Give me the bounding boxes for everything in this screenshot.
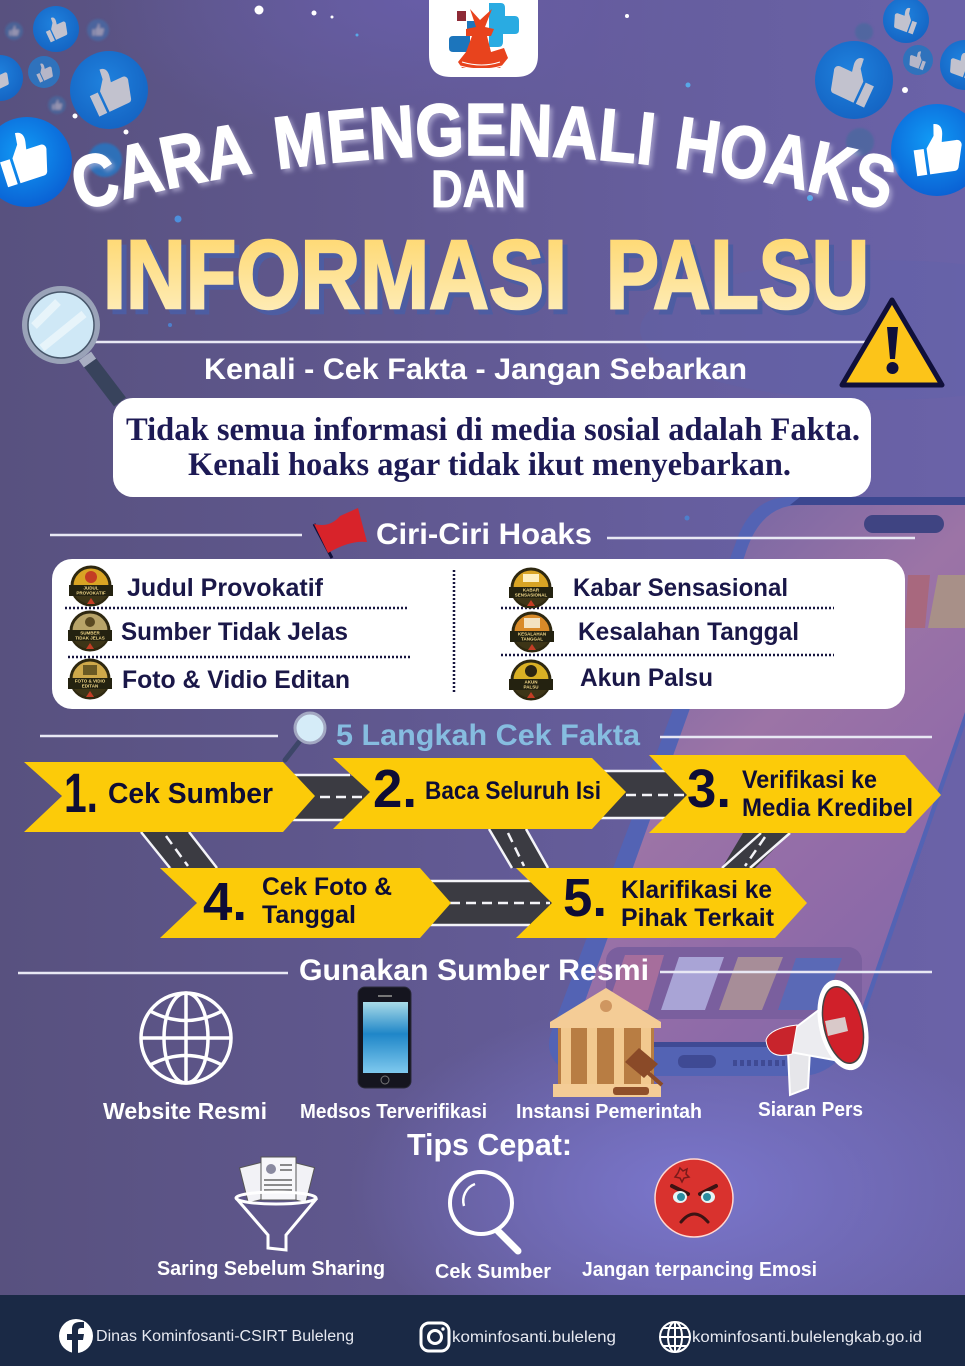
thumbs-up bubbles left [0,6,148,207]
icon: angry face [655,1159,733,1237]
badge: judul provokatif: PROVOKATIF [76,590,106,596]
panel: ciri-ciri list [52,559,905,709]
panel: intro message: Kenali hoaks agar tidak ikut menyebarkan. [188,447,791,483]
heading: ciri-ciri hoaks: Ciri-Ciri Hoaks [376,518,592,551]
divider under title [95,341,865,343]
badge: foto vidio editan: FOTO & VIDIO [75,678,106,684]
step 2: Baca Seluruh Isi [425,777,601,805]
step 5: Pihak Terkait [621,904,775,932]
badge: kabar sensasional: SENSASIONAL [515,592,547,598]
badge: sumber tidak jelas [68,612,112,650]
label: kabar sensasional: Kabar Sensasional [573,574,788,602]
title arc: MENGENALI [274,103,659,174]
badge: kabar sensasional: KABAR [523,588,540,592]
heading: gunakan sumber resmi: Gunakan Sumber Resmi [299,954,649,987]
step 4: Tanggal [262,901,356,929]
title informasi palsu: PALSU [606,220,869,329]
logo [429,0,538,77]
label: judul provokatif: Judul Provokatif [127,574,324,602]
step 2 [333,758,626,829]
badge: akun palsu: PALSU [524,684,538,690]
badge: akun palsu [509,661,553,699]
tagline: Kenali - Cek Fakta - Jangan Sebarkan [204,353,747,386]
labels: quick tips: Cek Sumber [435,1261,551,1283]
badge: foto vidio editan: EDITAN [82,684,98,688]
badge: akun palsu: AKUN [524,680,538,684]
title DAN: DAN [431,160,526,219]
title informasi palsu: INFORMASI [108,225,572,334]
icon: facebook [59,1319,93,1353]
labels: official sources: Instansi Pemerintah [516,1101,702,1123]
icon: megaphone [766,975,877,1095]
text: website address: kominfosanti.bulelengkab.go.id [692,1329,922,1346]
label: foto vidio editan: Foto & Vidio Editan [122,666,350,694]
label: akun palsu: Akun Palsu [580,664,713,692]
step 4 [160,868,451,938]
labels: quick tips: Saring Sebelum Sharing [157,1258,385,1280]
panel: intro message: Tidak semua informasi di media sosial adalah Fakta. [126,412,860,448]
label: kesalahan tanggal: Kesalahan Tanggal [578,618,799,646]
labels: official sources: Medsos Terverifikasi [300,1101,487,1123]
badge: sumber tidak jelas: TIDAK JELAS [75,636,105,640]
step 2: 2. [373,759,417,819]
labels: quick tips [157,1258,817,1283]
icon: smartphone [358,987,411,1088]
step 3: Media Kredibel [742,794,913,822]
icon: instagram [421,1323,449,1351]
badge: kabar sensasional [509,569,553,607]
badge: kesalahan tanggal: TANGGAL [521,636,543,642]
title informasi palsu: INFORMASI [103,220,567,329]
step 1: 1. [64,761,98,824]
labels: official sources [103,1098,863,1124]
badge: kesalahan tanggal: KESALAHAN [518,632,546,636]
icon: website [660,1322,690,1352]
road connectors [141,771,790,925]
step 5 [516,868,807,938]
badge: judul provokatif: JUDUL [83,586,99,590]
badge: sumber tidak jelas: SUMBER [80,630,100,636]
badge: foto vidio editan [68,660,112,698]
icon: magnifier [25,289,120,402]
icon: funnel with documents [236,1157,317,1250]
stars [72,6,908,520]
step 3 [649,755,941,833]
step 5: 5. [563,868,607,928]
text: facebook account: Dinas Kominfosanti-CSIRT Buleleng [96,1328,354,1345]
labels: official sources: Website Resmi [103,1098,267,1124]
step 4: 4. [203,872,247,932]
labels: quick tips: Jangan terpancing Emosi [582,1259,817,1281]
icon: search [450,1172,518,1251]
icon: warning triangle [842,300,942,385]
icon: globe [141,993,231,1083]
badge: judul provokatif [69,567,113,605]
step 5: Klarifikasi ke [621,876,772,904]
thumbs-up bubbles right [815,0,965,196]
step 3: 3. [687,759,731,819]
labels: official sources: Siaran Pers [758,1099,863,1121]
badge: kesalahan tanggal [510,613,554,651]
title informasi palsu [103,220,874,334]
step 1 [24,761,315,832]
label: sumber tidak jelas: Sumber Tidak Jelas [121,618,348,646]
title arc [73,103,900,212]
panel: footer [0,1295,965,1366]
heading: ciri-ciri hoaks [50,508,915,558]
phone illustration in background [549,497,965,1076]
icon: government building [550,988,662,1097]
heading: tips cepat: Tips Cepat: [407,1127,572,1162]
text: instagram account: kominfosanti.buleleng [452,1329,616,1346]
panel: intro message [113,398,871,497]
step 1: Cek Sumber [108,778,273,810]
title informasi palsu: PALSU [611,225,874,334]
heading: 5 langkah cek fakta: 5 Langkah Cek Fakta [336,719,640,752]
title arc: HOAKS [676,116,900,212]
step 4: Cek Foto & [262,873,392,901]
step 3: Verifikasi ke [742,766,877,794]
title arc: CARA [73,124,257,212]
heading: 5 langkah cek fakta [40,713,932,760]
